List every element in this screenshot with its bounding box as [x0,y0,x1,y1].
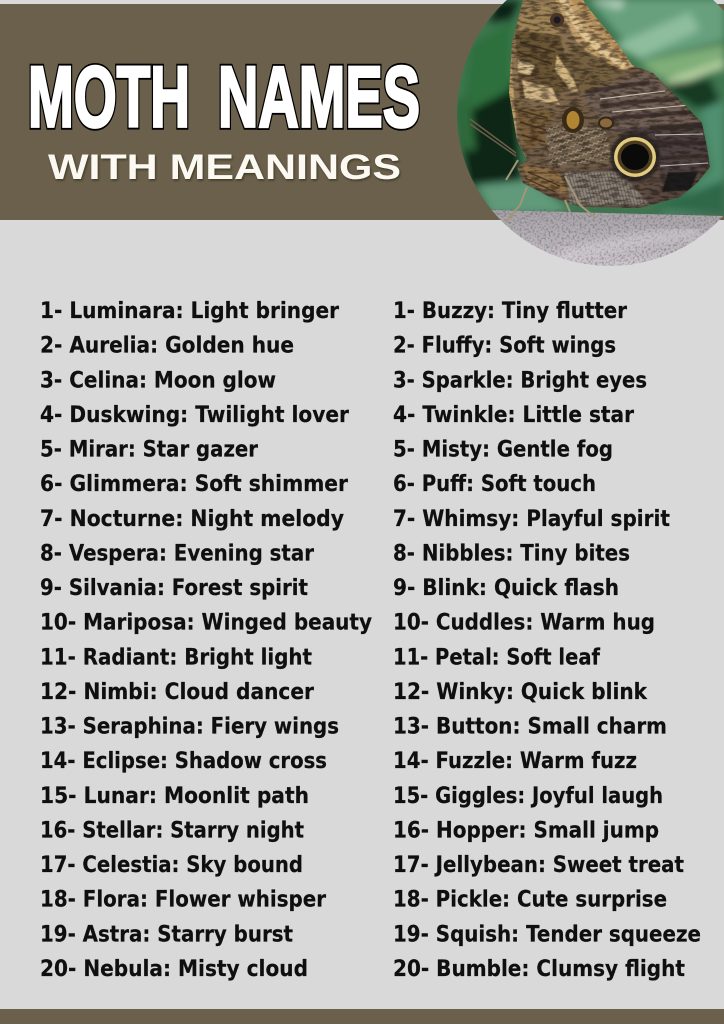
title: moth names: MOTH [28,50,190,146]
Lunar: 15- Lunar: Moonlit path [40,784,309,809]
cream dark forewing marks [518,42,560,192]
Nibbles: 8- Nibbles: Tiny bites [393,541,630,566]
Cuddles: 10- Cuddles: Warm hug [393,611,655,636]
Aurelia: 2- Aurelia: Golden hue [40,334,294,359]
Seraphina: 13- Seraphina: Fiery wings [40,715,339,740]
Whimsy: 7- Whimsy: Playful spirit [393,507,670,532]
Fuzzle: 14- Fuzzle: Warm fuzz [393,749,637,774]
Stellar: 16- Stellar: Starry night [40,818,304,844]
title: moth names: MOTH [28,50,190,146]
Celina: 3- Celina: Moon glow [40,368,276,393]
Nocturne: 7- Nocturne: Night melody [40,507,344,532]
Pickle: 18- Pickle: Cute surprise [393,888,667,913]
Twinkle: 4- Twinkle: Little star [393,403,634,428]
name list: left column [40,299,372,982]
Duskwing: 4- Duskwing: Twilight lover [40,403,349,428]
title: moth names [28,50,420,146]
Buzzy: 1- Buzzy: Tiny flutter [393,299,627,324]
title: moth names: NAMES [218,50,420,146]
Nebula: 20- Nebula: Misty cloud [40,957,308,982]
Nimbi: 12- Nimbi: Cloud dancer [40,680,314,705]
photo: moth on stone in circle [450,0,724,280]
title: moth names: NAMES [218,50,420,146]
eyespot medium [562,107,584,133]
wing texture [509,0,710,208]
Button: 13- Button: Small charm [393,715,667,740]
header band [0,4,724,220]
Flora: 18- Flora: Flower whisper [40,888,326,913]
Bumble: 20- Bumble: Clumsy flight [393,957,685,982]
Misty: 5- Misty: Gentle fog [393,438,613,462]
Giggles: 15- Giggles: Joyful laugh [393,784,663,809]
Mariposa: 10- Mariposa: Winged beauty [40,611,372,636]
antennae [470,119,516,156]
Astra: 19- Astra: Starry burst [40,922,293,947]
moth wings [509,0,710,208]
eyespot large [610,132,660,182]
Winky: 12- Winky: Quick blink [393,680,648,705]
footer band [0,1009,724,1024]
stone ledge [492,209,724,266]
Hopper: 16- Hopper: Small jump [393,818,659,844]
foliage background [450,0,724,220]
eyespot top [550,13,564,27]
Mirar: 5- Mirar: Star gazer [40,438,258,462]
Jellybean: 17- Jellybean: Sweet treat [393,853,684,878]
Sparkle: 3- Sparkle: Bright eyes [393,368,647,393]
forewing golden scallop band [555,0,635,75]
Celestia: 17- Celestia: Sky bound [40,853,303,878]
Vespera: 8- Vespera: Evening star [40,541,314,566]
Eclipse: 14- Eclipse: Shadow cross [40,749,327,774]
wing pale lines [600,91,708,166]
Puff: 6- Puff: Soft touch [393,472,596,497]
subtitle: with meanings: WITH MEANINGS [48,147,401,187]
hatch pattern [568,172,648,205]
Radiant: 11- Radiant: Bright light [40,645,312,670]
scallop markings [562,0,630,66]
legs [506,160,596,222]
Luminara: 1- Luminara: Light bringer [40,299,339,324]
name list: right column [393,299,701,982]
Silvania: 9- Silvania: Forest spirit [40,576,308,601]
Blink: 9- Blink: Quick flash [393,576,619,601]
Fluffy: 2- Fluffy: Soft wings [393,334,616,359]
Petal: 11- Petal: Soft leaf [393,645,600,670]
zigzag pattern [545,125,612,166]
wing rib bands [585,82,708,158]
eyespot small [599,118,613,128]
Glimmera: 6- Glimmera: Soft shimmer [40,472,348,497]
